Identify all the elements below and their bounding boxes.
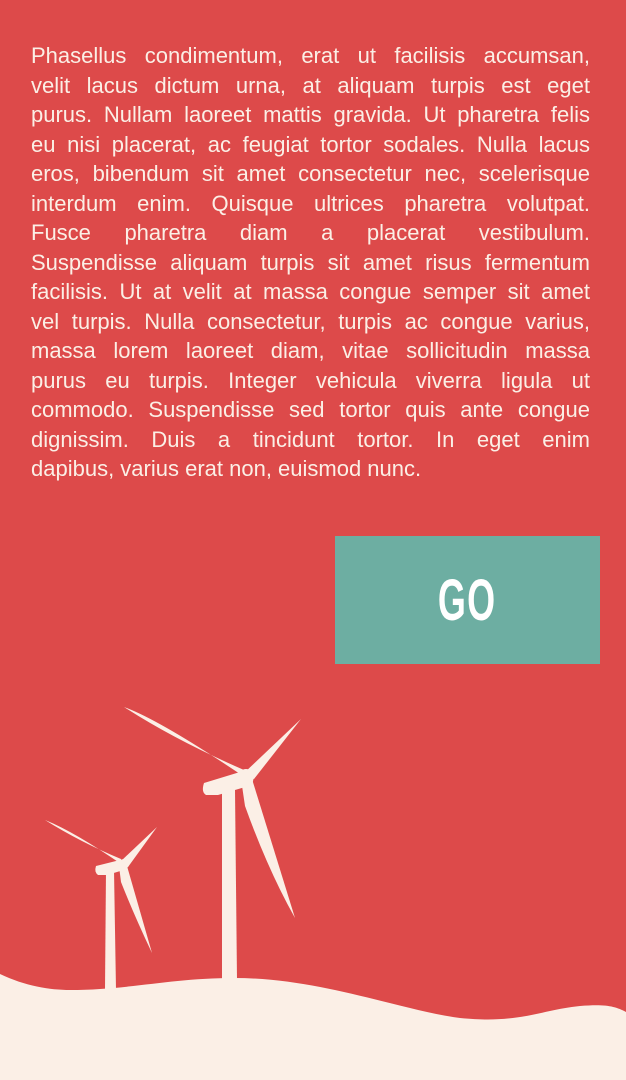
body text: commodo. Suspendisse sed tortor quis ante congue bbox=[31, 397, 590, 422]
body text: eros, bibendum sit amet consectetur nec, scelerisque bbox=[31, 161, 590, 186]
body text: velit lacus dictum urna, at aliquam turpis est eget bbox=[31, 72, 590, 98]
ground wave bbox=[0, 974, 626, 1080]
turbine: large bbox=[124, 707, 301, 980]
body text: Phasellus condimentum, erat ut facilisis accumsan, bbox=[31, 43, 590, 68]
body text: purus eu turpis. Integer vehicula viverra ligula ut bbox=[31, 368, 590, 392]
body text: purus. Nullam laoreet mattis gravida. Ut pharetra felis bbox=[31, 102, 590, 127]
body text: facilisis. Ut at velit at massa congue semper sit amet bbox=[31, 279, 590, 304]
body text: vel turpis. Nulla consectetur, turpis ac congue varius, bbox=[31, 308, 590, 334]
GO button bbox=[335, 536, 600, 664]
body text bbox=[31, 43, 590, 481]
turbine: small bbox=[45, 820, 157, 990]
body text: interdum enim. Quisque ultrices pharetra volutpat. bbox=[31, 190, 590, 216]
body text: Suspendisse aliquam turpis sit amet risus fermentum bbox=[31, 250, 590, 274]
body text: Fusce pharetra diam a placerat vestibulum. bbox=[31, 220, 590, 245]
body text: massa lorem laoreet diam, vitae sollicitudin massa bbox=[31, 338, 590, 363]
GO button: GO bbox=[438, 568, 497, 632]
body text: eu nisi placerat, ac feugiat tortor sodales. Nulla lacus bbox=[31, 132, 590, 156]
body text: dignissim. Duis a tincidunt tortor. In eget enim bbox=[31, 426, 590, 452]
body text: dapibus, varius erat non, euismod nunc. bbox=[31, 456, 421, 481]
